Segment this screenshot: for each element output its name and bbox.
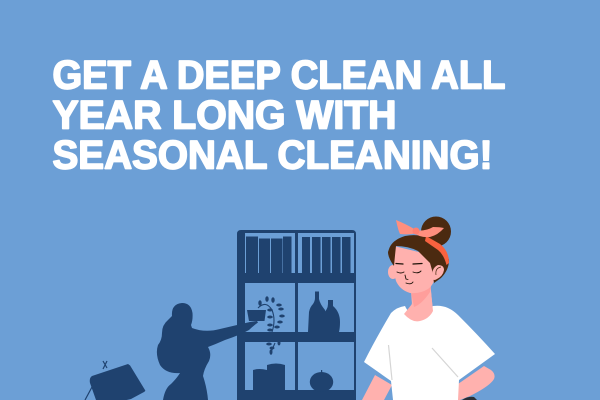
bookshelf bbox=[237, 230, 356, 400]
vases bbox=[308, 292, 340, 332]
shirt fold lines bbox=[388, 345, 458, 380]
title: SEASONAL CLEANING! bbox=[52, 134, 492, 178]
books bbox=[246, 236, 350, 274]
arms bbox=[362, 375, 392, 400]
headband and bow bbox=[396, 220, 449, 265]
dark item held at lower right bbox=[462, 397, 477, 400]
table lamp silhouette bbox=[85, 361, 145, 400]
title: YEAR LONG WITH bbox=[52, 94, 396, 138]
right ear bbox=[432, 265, 444, 280]
neck bbox=[404, 280, 433, 314]
apple bbox=[310, 370, 333, 392]
face bbox=[393, 246, 437, 293]
woman character bbox=[362, 216, 495, 400]
hair bbox=[388, 235, 449, 283]
hair bun bbox=[421, 216, 451, 246]
left ear bbox=[388, 265, 398, 279]
hanging plant bbox=[247, 296, 285, 355]
shirt bbox=[364, 306, 495, 400]
closed eyes, brows, nose and mouth bbox=[396, 264, 422, 284]
title bbox=[52, 54, 506, 178]
title: GET A DEEP CLEAN ALL bbox=[52, 54, 506, 98]
candles bbox=[253, 364, 285, 390]
silhouette of woman reaching to shelf bbox=[157, 303, 258, 400]
